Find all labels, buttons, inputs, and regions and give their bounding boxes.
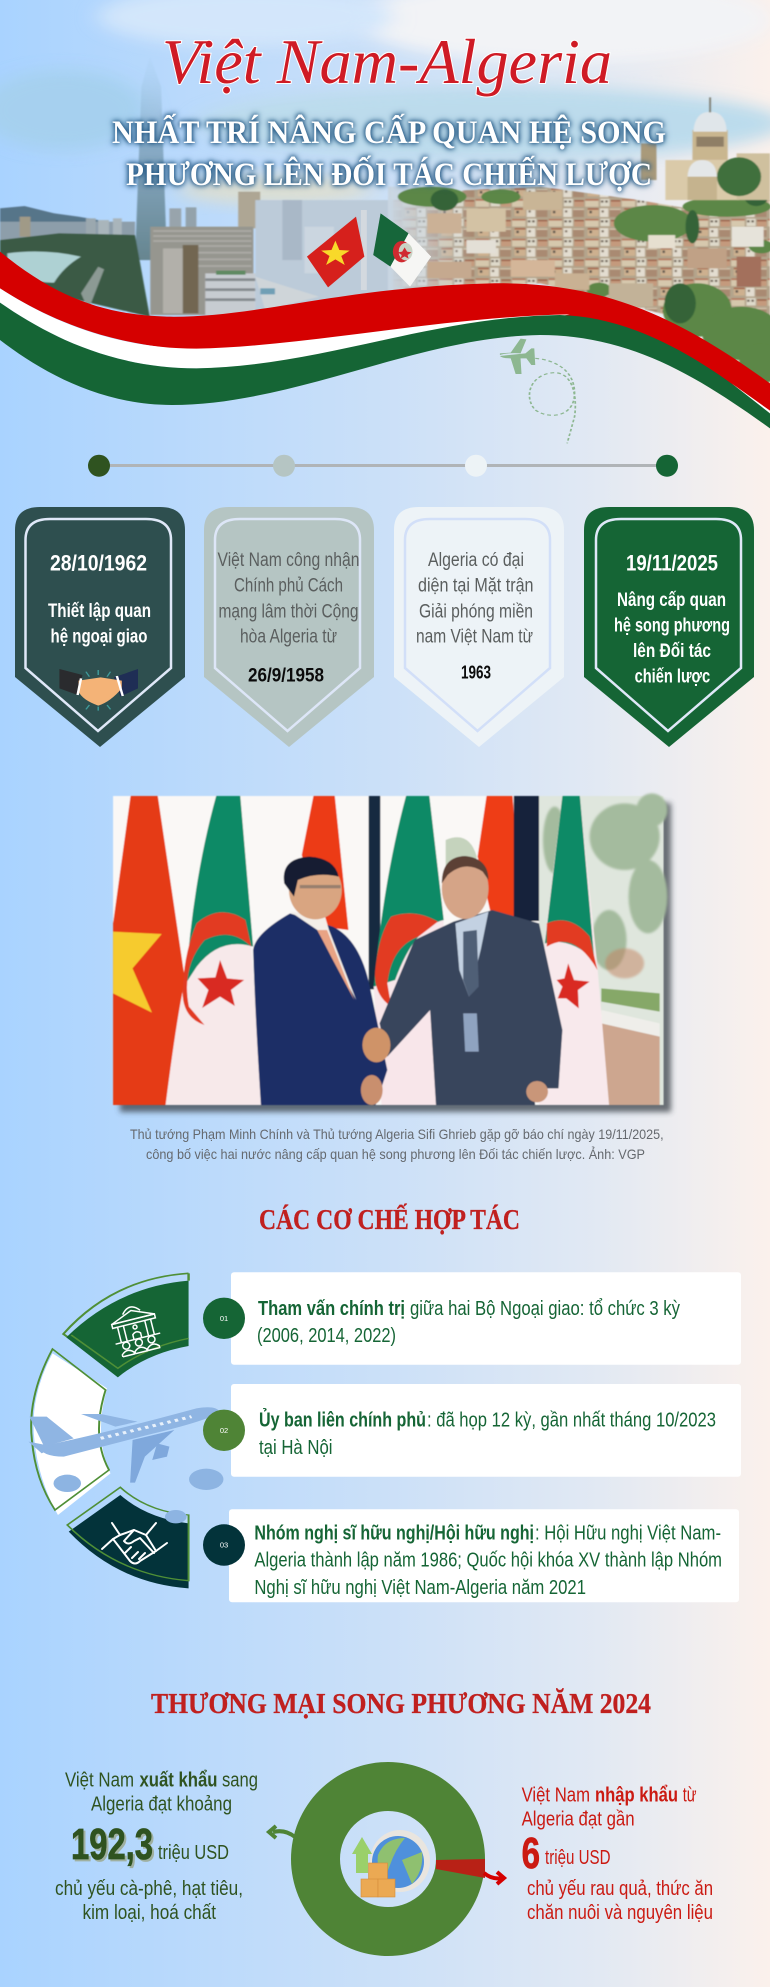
import text [522,1785,713,1924]
arc segment 1 [63,1273,189,1377]
export value: 192,3 [71,1820,153,1869]
badge 01: 01 [220,1314,228,1323]
badge 02 [203,1410,245,1451]
import slice [436,1859,485,1878]
badge 02: 02 [220,1426,228,1435]
central haze [255,200,393,315]
timeline [88,455,678,477]
export text: kim loại, hoá chất [82,1902,216,1924]
import text: Algeria đạt gần [522,1809,635,1831]
icon: parliament building [108,1302,164,1358]
badge 03: 03 [220,1541,228,1550]
text: : đã họp 12 kỳ, gần nhất tháng 10/2023 [427,1410,716,1432]
export text: chủ yếu cà-phê, hạt tiêu, [55,1878,243,1900]
date: 26/9/1958 [248,666,324,687]
title: Việt Nam-Algeria [162,26,612,97]
text: : Hội Hữu nghị Việt Nam- [535,1522,721,1544]
description: Chính phủ Cách [234,576,343,597]
person: left man [253,913,387,1105]
import text: chủ yếu rau quả, thức ăn [527,1878,713,1900]
export text: xuất khẩu [140,1770,218,1792]
card 01 [203,1272,741,1365]
text: Nhóm nghị sĩ hữu nghị/Hội hữu nghị [254,1522,534,1544]
text: Ủy ban liên chính phủ [259,1408,426,1432]
icon: handshake outline [102,1523,167,1564]
date: 19/11/2025 [626,551,718,576]
subtitle [112,112,666,193]
description [218,550,360,648]
arc segment 2 [31,1349,110,1515]
left hills [0,206,98,260]
icon: plane and dashed flight path [500,339,575,443]
export text: Algeria đạt khoảng [91,1794,232,1816]
description: chiến lược [635,667,710,688]
export text: sang [222,1770,258,1792]
date: 28/10/1962 [50,551,147,576]
left skyline [0,192,260,245]
description: hệ song phương [614,616,730,637]
heading: mechanisms: CÁC CƠ CHẾ HỢP TÁC [259,1204,520,1236]
description: hòa Algeria từ [240,627,337,648]
large houses [427,192,764,307]
description: nam Việt Nam từ [416,627,533,648]
river and foliage [0,233,150,317]
icon: handshake [59,669,138,711]
ribbon [0,252,770,428]
badge 03 [203,1524,245,1566]
export text: triệu USD [158,1842,229,1864]
text: (2006, 2014, 2022) [257,1325,396,1347]
icon: airplane [28,1407,220,1483]
subtitle: NHẤT TRÍ NÂNG CẤP QUAN HỆ SONG [112,112,666,151]
arc segment 3 [67,1487,189,1588]
header [0,0,770,443]
text: giữa hai Bộ Ngoại giao: tổ chức 3 kỳ [410,1298,680,1320]
import text: từ [683,1785,696,1807]
badge 01 [203,1298,245,1339]
basilica [641,97,770,200]
card 02 [203,1384,741,1477]
text: Tham vấn chính trị [258,1298,405,1320]
icon: globe with parcels [352,1830,430,1897]
import text: chăn nuôi và nguyên liệu [527,1902,713,1924]
text: Nghị sĩ hữu nghị Việt Nam-Algeria năm 2021 [254,1577,586,1599]
import value: 6 [522,1829,540,1878]
arrow: import [484,1872,504,1884]
import text: Việt Nam [522,1785,590,1807]
panel: 28/10/1962 [15,507,185,747]
export text [55,1770,258,1924]
photo: the two prime ministers shaking hands [113,793,671,1112]
import text: nhập khẩu [595,1785,678,1807]
panel: 26/9/1958 [204,507,374,747]
flags [113,796,185,1105]
town [393,187,770,387]
description: mạng lâm thời Cộng [218,601,358,622]
panel: 1963 [394,507,564,747]
text [257,1298,680,1347]
green hillside [398,187,770,383]
card 03 [203,1509,739,1602]
grey tower block [150,227,253,315]
description: Nâng cấp quan [617,590,726,611]
icon: flags [307,210,431,290]
header photo collage [0,0,770,387]
description: Việt Nam công nhận [218,550,360,571]
description: lên Đối tác [633,641,711,662]
panel: 19/11/2025 [584,507,754,747]
description: Algeria có đại [428,550,524,571]
description [614,590,730,688]
arrow: export [269,1826,295,1838]
description [48,601,151,648]
import text: triệu USD [545,1847,610,1869]
person: right man [380,910,562,1105]
arc diagram [28,1273,223,1588]
photo caption [130,1126,664,1162]
description: Thiết lập quan [48,601,151,622]
description [416,550,534,648]
description: hệ ngoại giao [50,627,148,648]
text [259,1408,716,1459]
export text: Việt Nam [65,1770,134,1792]
description: diện tại Mặt trận [418,576,534,597]
description: Giải phóng miền [419,601,533,622]
icon: clouds [54,1469,223,1523]
date: 1963 [461,663,491,683]
text [254,1522,722,1599]
subtitle: PHƯƠNG LÊN ĐỐI TÁC CHIẾN LƯỢC [126,154,652,193]
donut chart [291,1762,485,1956]
photo caption: công bố việc hai nước nâng cấp quan hệ song phương lên Đối tác chiến lược. Ảnh: VGP [146,1146,645,1162]
text: tại Hà Nội [259,1437,332,1459]
heading: trade: THƯƠNG MẠI SONG PHƯƠNG NĂM 2024 [151,1689,651,1720]
tower [135,57,167,260]
photo caption: Thủ tướng Phạm Minh Chính và Thủ tướng Algeria Sifi Ghrieb gặp gỡ báo chí ngày 19/11/2025, [130,1126,664,1142]
